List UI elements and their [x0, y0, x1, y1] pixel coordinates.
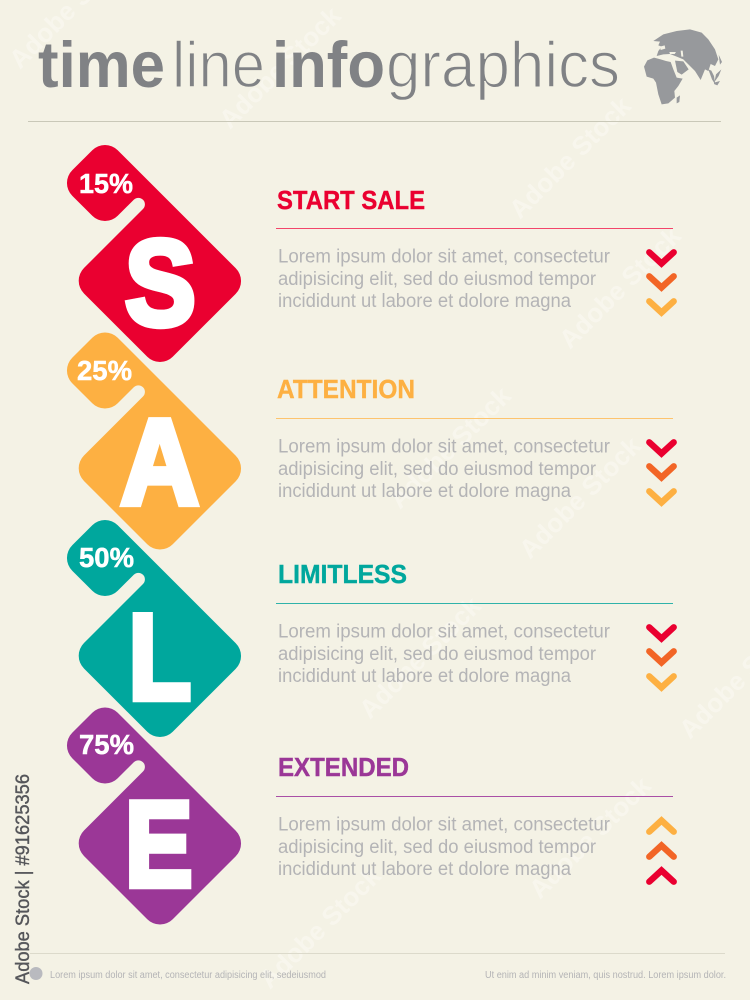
body text: Lorem ipsum dolor sit amet, consectetur: [278, 436, 611, 458]
title: graphics: [386, 28, 620, 101]
body text: [278, 814, 611, 880]
tag shape: S: [67, 145, 241, 362]
title: time: [38, 28, 165, 101]
title: line: [172, 28, 265, 101]
percent: 15%: 15%: [79, 168, 133, 199]
tag shape: E: [67, 707, 241, 925]
header divider: [28, 121, 721, 122]
tag shape: L: [67, 520, 241, 737]
text: Adobe Stock: [503, 90, 637, 224]
footer text right: Ut enim ad minim veniam, quis nostrud. Lorem ipsum dolor.: [485, 970, 726, 981]
text: Adobe Stock: [383, 380, 517, 514]
chevrons down: [649, 252, 674, 312]
step 4: extended: [67, 707, 674, 925]
letter L: L: [128, 589, 191, 725]
body text: incididunt ut labore et dolore magna: [278, 859, 571, 880]
text: Adobe Stock: [213, 0, 347, 134]
body text: incididunt ut labore et dolore magna: [278, 291, 571, 312]
text: Adobe Stock: [513, 430, 647, 564]
letter E: E: [125, 776, 193, 912]
heading: ATTENTION: [277, 374, 415, 404]
vertical stock label: Adobe Stock | #91625356: [13, 774, 34, 984]
title: info: [272, 28, 385, 101]
body text: Lorem ipsum dolor sit amet, consectetur: [278, 246, 611, 268]
title: [38, 28, 620, 101]
letter S: S: [125, 215, 196, 352]
chevrons down: [649, 627, 674, 688]
footer divider: [30, 953, 725, 954]
percent: 50%: 50%: [79, 542, 134, 573]
percent: 25%: 25%: [77, 355, 132, 386]
body text: adipisicing elit, sed do eiusmod tempor: [278, 269, 597, 290]
body text: adipisicing elit, sed do eiusmod tempor: [278, 837, 597, 858]
footer text left: Lorem ipsum dolor sit amet, consectetur adipisicing elit, sedeiusmod: [50, 970, 326, 981]
heading: EXTENDED: [278, 752, 409, 782]
step 3: limitless: [67, 520, 674, 737]
step 2: attention: [67, 332, 674, 550]
body text: [278, 436, 611, 502]
body text: [278, 622, 611, 687]
body text: Lorem ipsum dolor sit amet, consectetur: [278, 814, 611, 836]
text: Adobe Stock: [523, 770, 657, 904]
text: Adobe Stock: [253, 860, 387, 994]
heading: LIMITLESS: [278, 559, 407, 589]
body text: [278, 246, 611, 312]
body text: adipisicing elit, sed do eiusmod tempor: [278, 644, 597, 665]
chevrons down: [649, 442, 674, 502]
heading: START SALE: [277, 185, 425, 215]
chevrons up: [649, 820, 674, 882]
body text: Lorem ipsum dolor sit amet, consectetur: [278, 622, 611, 642]
body text: incididunt ut labore et dolore magna: [278, 481, 571, 502]
icon: globe: [644, 29, 722, 104]
percent: 75%: 75%: [79, 729, 134, 760]
text: Adobe Stock: [553, 220, 687, 354]
letter A: A: [120, 394, 199, 530]
body text: adipisicing elit, sed do eiusmod tempor: [278, 459, 597, 480]
step 1: start sale: [67, 145, 674, 362]
footer dot: [30, 967, 42, 980]
tag shape: A: [67, 332, 241, 550]
text: Adobe Stock: [353, 590, 487, 724]
body text: incididunt ut labore et dolore magna: [278, 666, 571, 687]
